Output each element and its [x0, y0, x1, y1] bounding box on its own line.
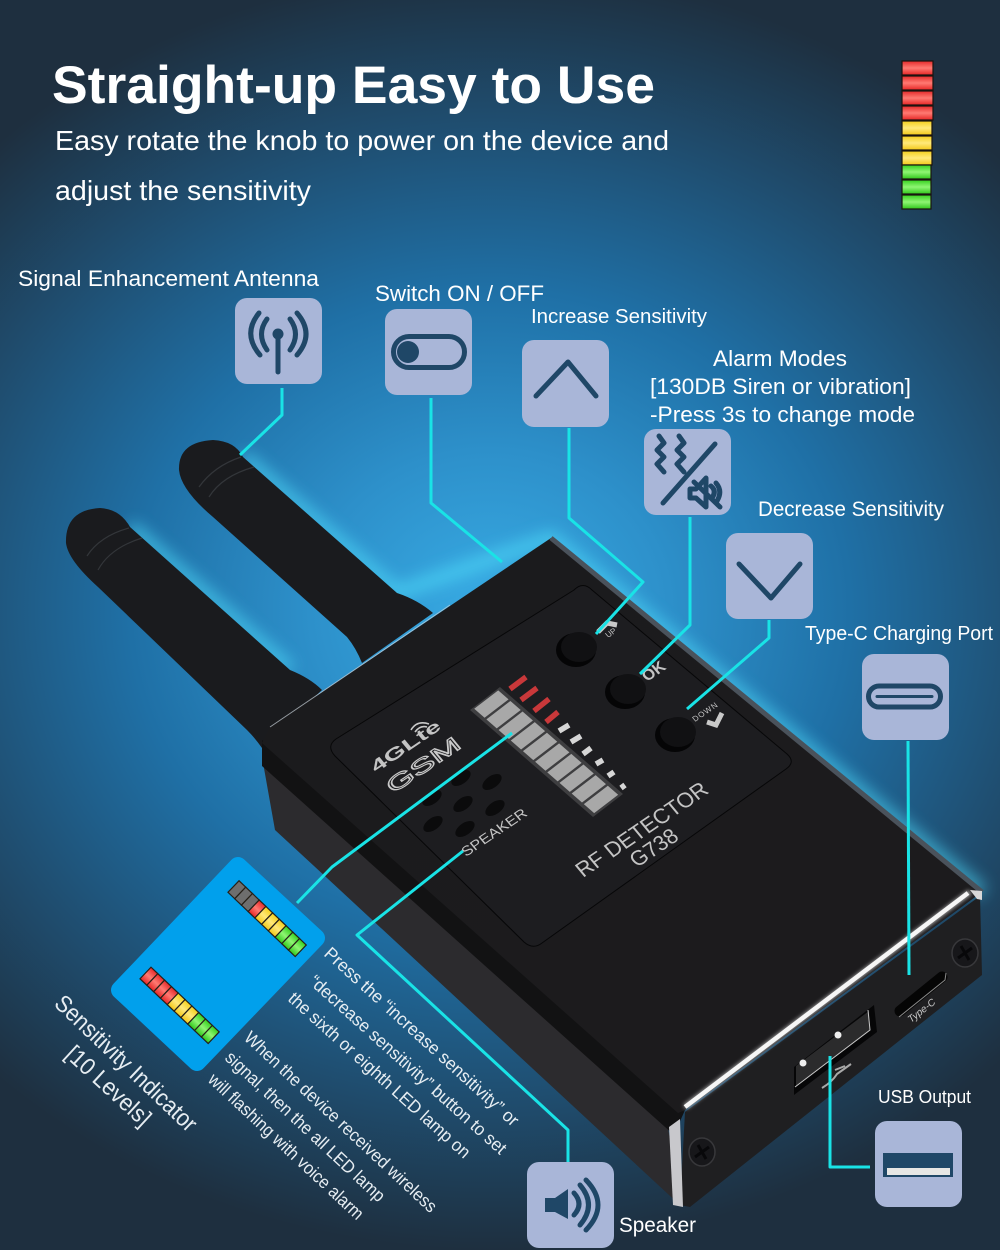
panel labels [366, 623, 722, 882]
text: alarm behaviour: signal, then the all LED lamp [221, 1047, 389, 1206]
text: alarm behaviour: will flashing with voice alarm [204, 1069, 368, 1224]
screws [689, 939, 978, 1166]
text: sensitivity instructions: Press the “increase sensitivity” or [320, 943, 523, 1130]
USB port [794, 1005, 877, 1095]
label: antenna: Signal Enhancement Antenna [18, 266, 320, 291]
icon: down chevron [726, 533, 813, 619]
label: sensitivity indicator: [10 Levels] [60, 1041, 156, 1132]
buttons [556, 632, 696, 752]
icon: speaker [527, 1162, 614, 1248]
text: alarm behaviour: When the device received wireless [240, 1027, 441, 1217]
LED bar [470, 687, 623, 817]
label: alarm modes: Alarm Modes [713, 346, 847, 371]
white metal edge [685, 892, 970, 1107]
speaker holes [420, 767, 507, 840]
label: alarm modes: -Press 3s to change mode [650, 402, 915, 427]
panel labels: GSM [381, 733, 466, 798]
subtitle text: adjust the sensitivity [55, 175, 311, 206]
panel labels: OK [639, 658, 670, 685]
device side face [262, 740, 685, 1207]
subtitle text [55, 125, 669, 206]
connector lines [240, 388, 909, 1167]
panel labels: G738 [624, 823, 683, 872]
panel labels: RF DETECTOR [570, 777, 713, 882]
LED strip: partly lit [228, 881, 306, 957]
LED scale marks [510, 677, 625, 788]
panel labels: 4GLte [366, 717, 445, 776]
label: alarm modes [650, 346, 915, 427]
label: USB output: USB Output [878, 1087, 971, 1107]
icon: switch [385, 309, 472, 395]
label: decrease sensitivity: Decrease Sensitivity [758, 498, 944, 521]
icon: type-c [862, 654, 949, 740]
Type-C port [899, 973, 946, 1025]
label: speaker: Speaker [619, 1214, 696, 1237]
label: type-c port: Type-C Charging Port [805, 623, 993, 645]
panel: sensitivity indicator card [120, 866, 316, 1062]
label: switch: Switch ON / OFF [375, 281, 544, 306]
text: sensitivity instructions: “decrease sensitivity” button to set [305, 971, 511, 1158]
label: sensitivity indicator: Sensitivity Indicator [49, 990, 202, 1137]
device top face [262, 538, 982, 1113]
device body [262, 538, 982, 1207]
icon: antenna [235, 298, 322, 384]
device control panel [331, 586, 791, 946]
antenna: back [179, 440, 433, 663]
LED strip: fully lit [140, 967, 219, 1044]
panel labels: DOWN [691, 701, 720, 724]
label: increase sensitivity: Increase Sensitivity [531, 306, 707, 328]
antenna: front [66, 508, 322, 748]
label: alarm modes: [130DB Siren or vibration] [650, 374, 911, 399]
icon: USB [875, 1121, 962, 1207]
panel labels: UP [604, 626, 619, 640]
icon: vibration and mute [644, 429, 731, 515]
icon: up chevron [522, 340, 609, 427]
antennas [66, 440, 433, 748]
subtitle text: Easy rotate the knob to power on the device and [55, 125, 669, 156]
title: Straight-up Easy to Use [52, 56, 655, 115]
glow around device [130, 457, 982, 892]
Type-C port: Type-C [906, 996, 939, 1025]
icon: LED level meter [902, 61, 933, 209]
panel labels: SPEAKER [458, 805, 530, 859]
device front face [669, 890, 982, 1207]
text: sensitivity instructions: the sixth or eighth LED lamp on [284, 988, 475, 1162]
